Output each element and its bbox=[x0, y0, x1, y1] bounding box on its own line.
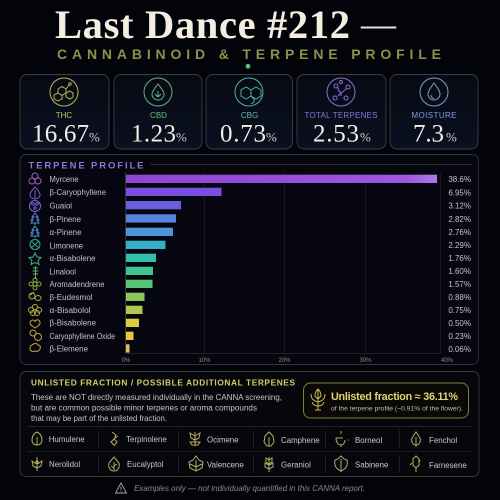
icon: moisture drop bbox=[420, 78, 448, 106]
icon: CBG hexagons bbox=[235, 78, 263, 106]
terpene values bbox=[448, 175, 471, 354]
terpene values: 0.06% bbox=[448, 345, 471, 354]
compound: Geraniol: Geraniol bbox=[281, 460, 311, 470]
terpene names: β-Elemene bbox=[50, 344, 89, 354]
compound: Fenchol: Fenchol bbox=[429, 436, 457, 445]
label: CBG: CBG bbox=[241, 111, 258, 120]
terpene names: Caryophyllene Oxide bbox=[50, 332, 115, 341]
axis labels: 40% bbox=[441, 358, 454, 364]
panel: CBD bbox=[114, 74, 202, 149]
title: — bbox=[360, 1, 397, 46]
terpene values: 1.60% bbox=[448, 267, 471, 276]
panel: unlisted fraction bbox=[20, 372, 479, 476]
terpene values: 0.23% bbox=[448, 332, 471, 341]
terpene names: α-Bisabolene bbox=[50, 254, 96, 263]
compound: Eucalyptol: Eucalyptol bbox=[127, 460, 164, 469]
panel: THC bbox=[20, 74, 109, 149]
compound: Farnesene bbox=[410, 456, 467, 472]
value: CBD: 1.23 bbox=[131, 120, 176, 148]
callout note: of the terpene profile (~0.91% of the flower). bbox=[331, 406, 463, 413]
panel: CBG bbox=[206, 74, 292, 149]
terpene values: 2.29% bbox=[448, 241, 471, 250]
label: CBD: CBD bbox=[150, 111, 167, 120]
title: Last Dance #212 bbox=[55, 2, 350, 47]
terpene icons bbox=[28, 173, 42, 351]
compound: Valencene bbox=[189, 456, 244, 471]
percent: total terpenes: % bbox=[360, 130, 371, 144]
terpene names: Guaiol bbox=[50, 202, 72, 210]
icon: THC molecule bbox=[50, 78, 78, 106]
compound: Terpinolene: Terpinolene bbox=[126, 435, 167, 444]
heading: terpene profile: TERPENE PROFILE bbox=[28, 160, 144, 172]
compound: Sabinene bbox=[335, 456, 389, 472]
icon: CBD drop bbox=[144, 78, 172, 106]
compound: Terpinolene bbox=[111, 432, 167, 446]
percent: moisture: % bbox=[446, 130, 457, 144]
compound: Ocimene: Ocimene bbox=[207, 436, 239, 444]
percent: THC: % bbox=[89, 130, 100, 144]
panel: total terpenes bbox=[297, 74, 386, 149]
value: total terpenes: 2.53 bbox=[313, 120, 359, 148]
compound: Fenchol bbox=[412, 432, 457, 447]
compound: Valencene: Valencene bbox=[207, 460, 244, 470]
compound: Nerolidol: Nerolidol bbox=[49, 460, 80, 469]
callout value: Unlisted fraction ≈ 36.11% bbox=[331, 391, 458, 403]
label: moisture: MOISTURE bbox=[412, 111, 456, 120]
terpene values: 0.50% bbox=[448, 319, 471, 328]
terpene names: β-Pinene bbox=[50, 215, 82, 224]
bar chart: terpene percentages bbox=[126, 175, 437, 353]
terpene names: α-Pinene bbox=[50, 228, 82, 237]
axis labels: 0% bbox=[122, 358, 131, 364]
compound: Sabinene: Sabinene bbox=[355, 460, 389, 470]
footer text: Examples only — not individually quantified in this CANNA report. bbox=[134, 484, 365, 493]
icon: terpene network bbox=[327, 78, 355, 106]
heading: unlisted fraction: UNLISTED FRACTION / POSSIBLE ADDITIONAL TERPENES bbox=[31, 378, 295, 388]
terpene names: β-Bisabolene bbox=[50, 318, 97, 328]
value: THC: 16.67 bbox=[32, 120, 89, 148]
body text bbox=[31, 393, 282, 423]
terpene names: β-Caryophyllene bbox=[50, 188, 107, 197]
subtitle: CANNABINOID & TERPENE PROFILE bbox=[57, 46, 441, 62]
panel: terpene profile bbox=[20, 154, 478, 364]
terpene names: α-Bisabolol bbox=[50, 306, 91, 315]
label: THC: THC bbox=[56, 111, 72, 120]
percent: CBD: % bbox=[176, 130, 187, 144]
value: moisture: 7.3 bbox=[413, 120, 444, 148]
value: CBG: 0.73 bbox=[220, 120, 266, 148]
terpene values: 3.12% bbox=[448, 202, 471, 210]
compound: Humulene bbox=[32, 432, 85, 445]
footer note bbox=[116, 483, 365, 493]
terpene values: 2.76% bbox=[448, 228, 471, 237]
axis labels: 10% bbox=[198, 358, 211, 364]
compound: Borneol: Borneol bbox=[355, 436, 382, 445]
terpene values: 1.57% bbox=[448, 280, 471, 289]
compound: Humulene: Humulene bbox=[49, 435, 85, 444]
terpene names: Linalool bbox=[50, 268, 76, 276]
axis labels bbox=[122, 358, 454, 364]
compound: Ocimene bbox=[190, 432, 239, 446]
compound: Camphene bbox=[264, 432, 320, 446]
terpene values: 38.6% bbox=[448, 175, 471, 184]
terpene names: Myrcene bbox=[50, 175, 79, 184]
icon: warning triangle bbox=[116, 483, 126, 493]
compound: Farnesene: Farnesene bbox=[429, 461, 467, 470]
terpene values: 2.82% bbox=[448, 215, 471, 224]
terpene names: Aromadendrene bbox=[50, 280, 105, 289]
terpene names bbox=[50, 175, 115, 354]
divider with dot bbox=[45, 64, 456, 69]
compound: Camphene: Camphene bbox=[281, 436, 320, 445]
axis labels: 30% bbox=[359, 358, 372, 364]
compound: Geraniol bbox=[265, 457, 311, 472]
body text: but are common possible minor terpenes or aroma compounds bbox=[31, 404, 257, 413]
terpene values: 6.95% bbox=[448, 188, 471, 198]
percent: CBG: % bbox=[266, 130, 277, 144]
callout: unlisted fraction bbox=[304, 383, 468, 418]
compound: Borneol bbox=[336, 431, 382, 447]
terpene values: 1.76% bbox=[448, 254, 471, 263]
panel: moisture bbox=[390, 74, 478, 149]
body text: that may be part of the unlisted fraction. bbox=[31, 414, 167, 423]
terpene names: β-Eudesmol bbox=[50, 293, 93, 302]
terpene values: 0.75% bbox=[448, 306, 471, 315]
body text: These are NOT directly measured individually in the CANNA screening, bbox=[31, 393, 282, 402]
compound: Eucalyptol bbox=[109, 457, 164, 471]
terpene values: 0.88% bbox=[448, 293, 471, 302]
compound: Nerolidol bbox=[32, 457, 80, 471]
terpene names: Limonene bbox=[50, 242, 84, 250]
label: total terpenes: TOTAL TERPENES bbox=[304, 111, 378, 120]
axis labels: 20% bbox=[278, 358, 291, 364]
icon: callout leaf bbox=[311, 389, 325, 410]
